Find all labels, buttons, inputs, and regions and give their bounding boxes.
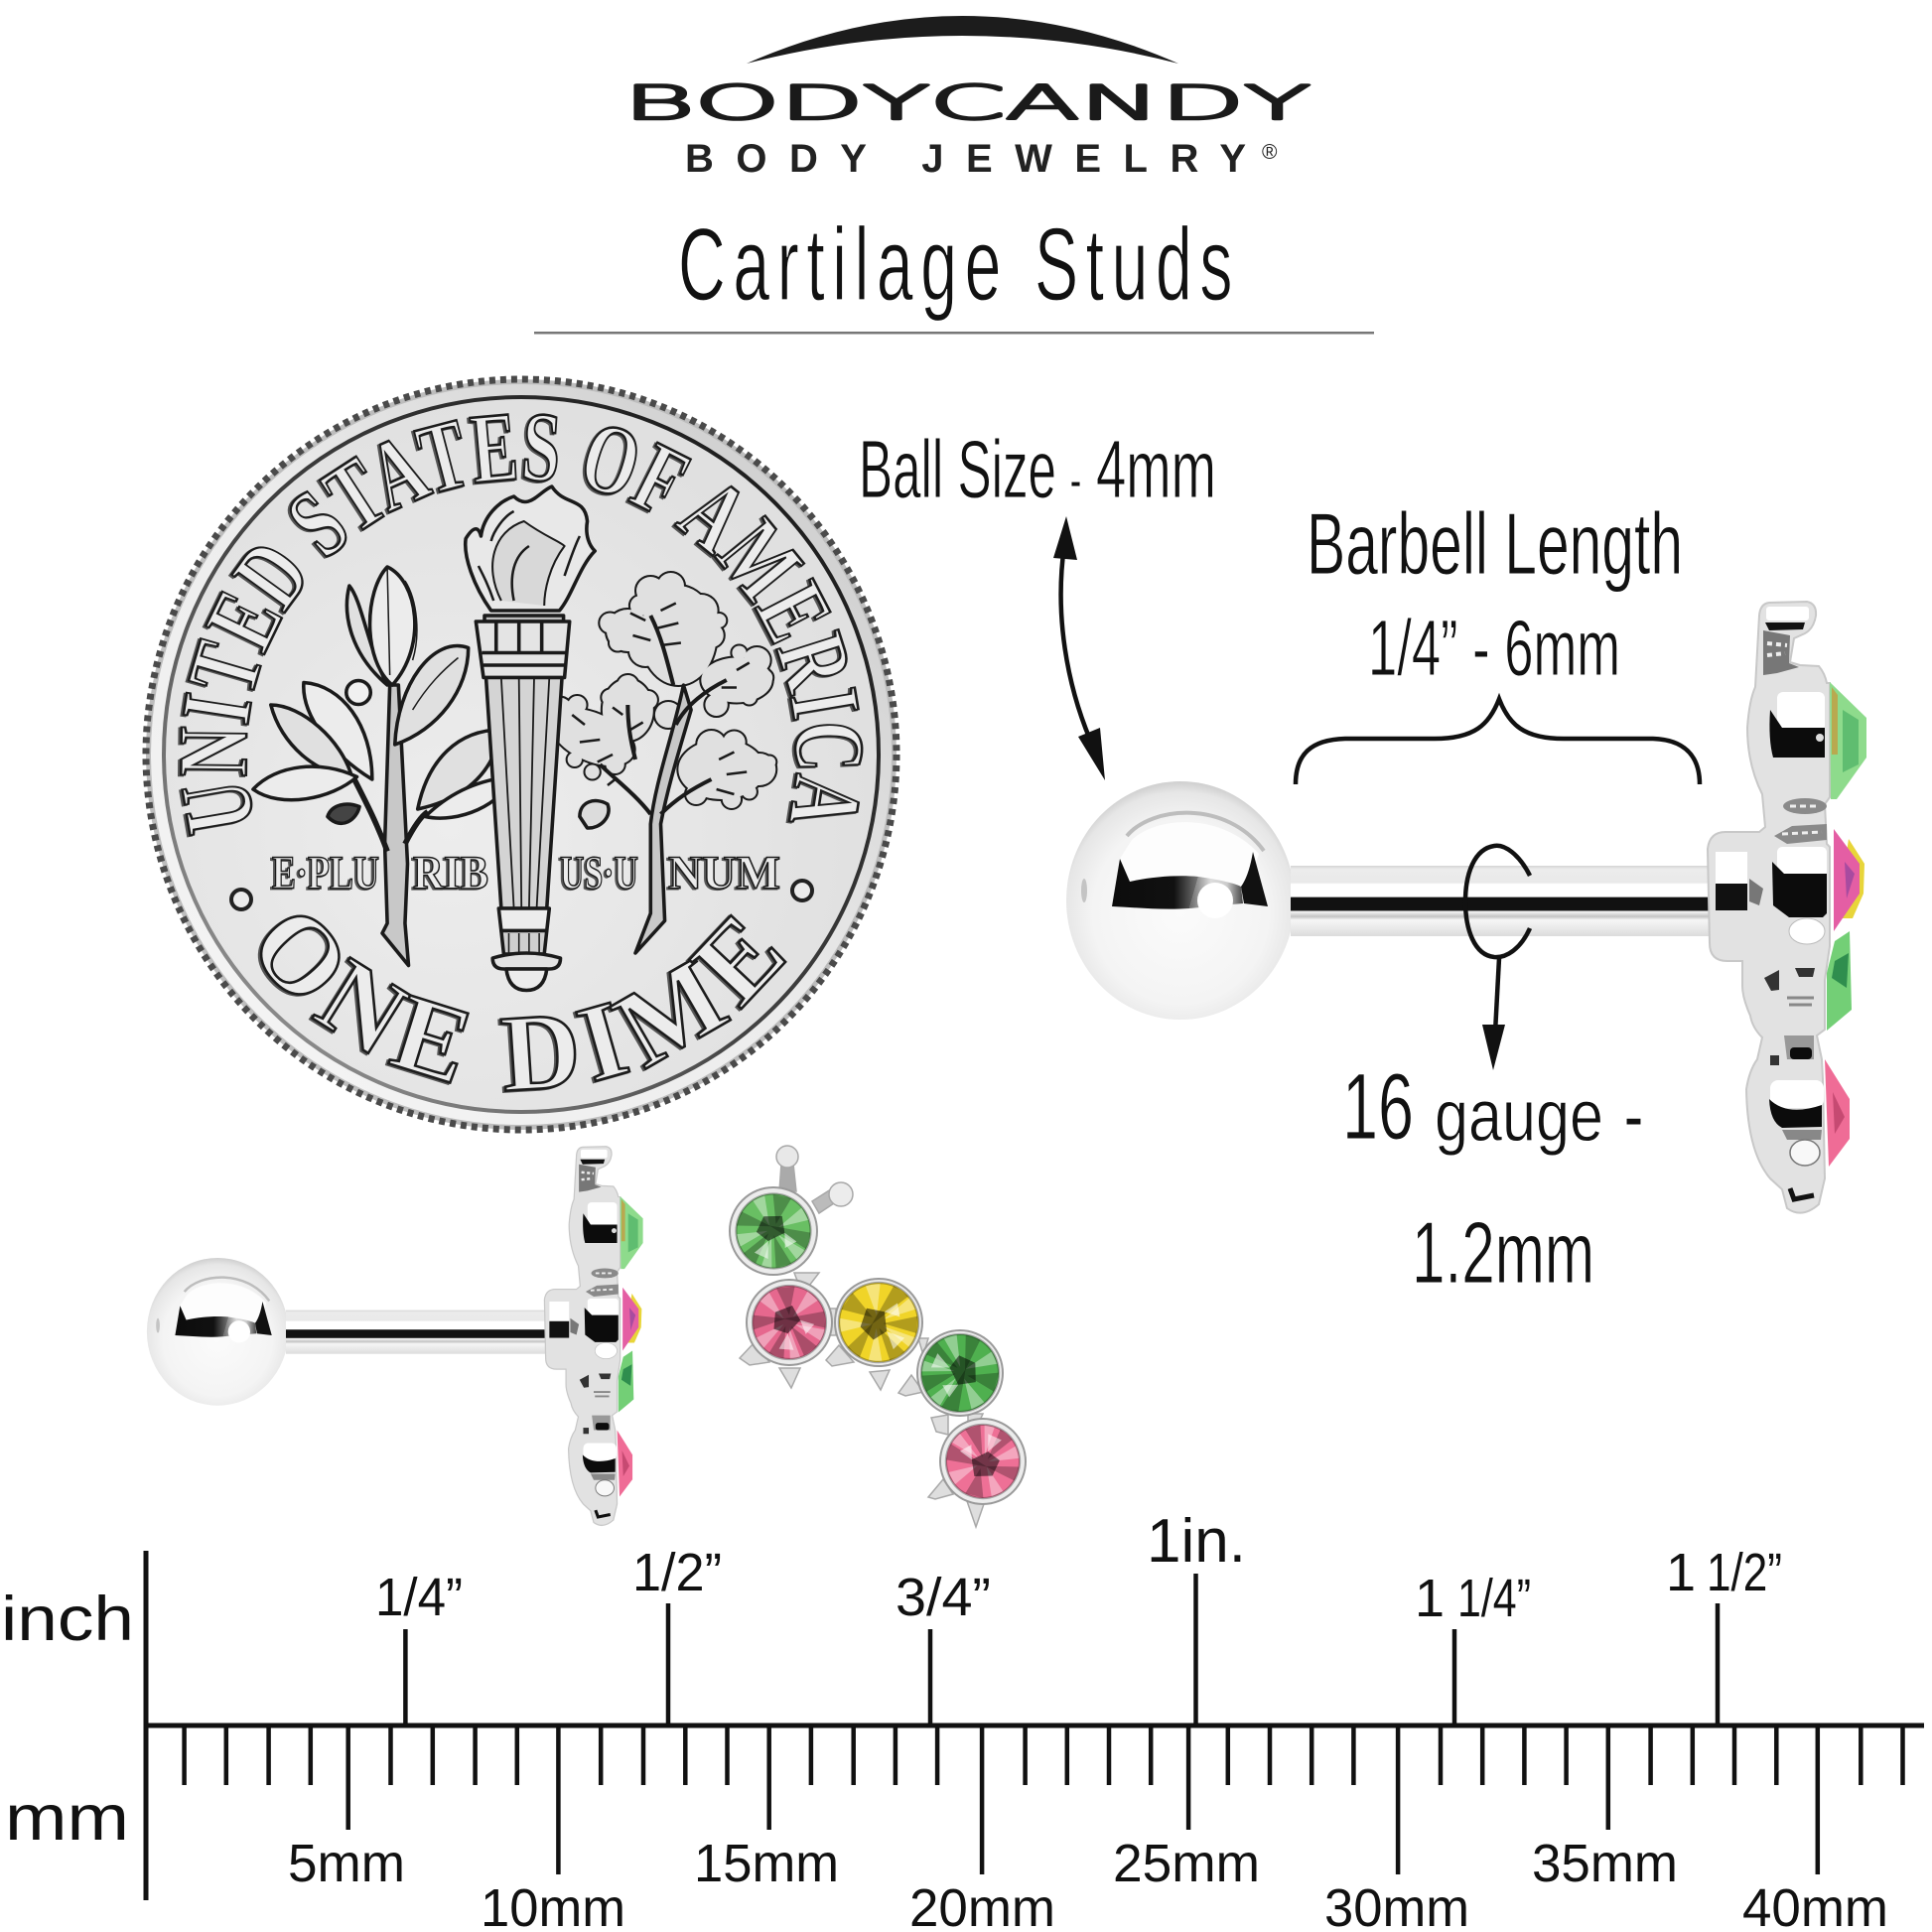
mm label 25: 25mm	[1113, 1834, 1260, 1893]
caterpillar stud front view	[726, 1146, 1030, 1527]
coin motto	[272, 847, 780, 899]
inch label one half: 1/2”	[1707, 1543, 1782, 1602]
mm label 35: 35mm	[1532, 1834, 1678, 1893]
callout: ball size	[859, 423, 1216, 515]
large stud side view	[1066, 602, 1866, 1213]
antennae and spikes	[740, 1146, 985, 1527]
torch	[466, 486, 595, 991]
coin rim	[151, 384, 892, 1125]
callout: gauge	[1342, 1054, 1643, 1302]
gauge dash: -	[1624, 1076, 1643, 1157]
coin field	[164, 397, 879, 1112]
logo arc	[747, 16, 1178, 64]
gauge metric: 1.2mm	[1412, 1203, 1594, 1302]
gauge number: 16	[1342, 1054, 1414, 1160]
logo tagline: BODY JEWELRY	[685, 137, 1246, 181]
motto RIB: RIB	[413, 847, 488, 899]
gem: green head	[726, 1183, 821, 1279]
inch label one quarter: 1	[1415, 1569, 1445, 1628]
coin artwork	[253, 486, 775, 991]
barbell length value: 1/4” - 6mm	[1368, 604, 1620, 692]
motto E PLU: E·PLU	[272, 847, 379, 899]
oak branch	[542, 573, 775, 953]
gem: green right	[910, 1323, 1010, 1423]
logo: Body Candy Body Jewelry	[623, 16, 1311, 181]
olive branch	[253, 567, 511, 965]
inch label one half	[1666, 1543, 1782, 1602]
inch label one quarter: 1/4”	[1457, 1569, 1531, 1628]
coin legend top: UNITED STATES OF AMERICA	[178, 413, 864, 838]
ruler	[1, 1507, 1924, 1932]
inch label three quarters: 3/4”	[896, 1568, 991, 1627]
motto NUM: NUM	[668, 847, 780, 899]
logo wordmark: BODYCANDY	[623, 76, 1311, 131]
inch ticks	[405, 1574, 1718, 1725]
ball size value: 4mm	[1096, 423, 1216, 515]
inch label one half: 1	[1666, 1543, 1696, 1602]
millimetre ticks	[185, 1725, 1903, 1874]
callout: barbell length	[1307, 494, 1683, 692]
gauge word: gauge	[1435, 1076, 1603, 1157]
inch label half: 1/2”	[632, 1543, 722, 1602]
gem: pink left	[747, 1280, 832, 1365]
bracket: barbell length	[1296, 699, 1700, 784]
registered mark: ®	[1262, 141, 1278, 164]
dime coin	[143, 375, 899, 1134]
coin dots	[231, 881, 812, 909]
inch label quarter: 1/4”	[375, 1568, 463, 1627]
coin legend bottom: ONE DIME	[258, 913, 787, 1093]
inch label one quarter	[1415, 1569, 1531, 1628]
gem: pink tail	[936, 1415, 1030, 1508]
mm label 15: 15mm	[694, 1834, 839, 1893]
ruler axis and baseline	[146, 1551, 1924, 1900]
arrow: ball size	[1053, 516, 1105, 780]
barbell length heading: Barbell Length	[1307, 494, 1683, 593]
ball size dash: -	[1070, 453, 1081, 508]
title: Cartilage Studs	[678, 207, 1240, 323]
gem: yellow	[823, 1267, 934, 1378]
inch label one: 1in.	[1147, 1507, 1246, 1576]
unit label inch: inch	[1, 1585, 134, 1654]
ball size label: Ball Size	[859, 423, 1056, 515]
motto US U: US·U	[560, 847, 638, 899]
coin reeded edge	[146, 379, 897, 1130]
gauge ring and arrow	[1465, 846, 1530, 1070]
small stud side view	[147, 1147, 643, 1525]
mm label 5: 5mm	[288, 1834, 405, 1893]
title underline	[534, 332, 1374, 334]
unit label mm: mm	[5, 1781, 129, 1854]
